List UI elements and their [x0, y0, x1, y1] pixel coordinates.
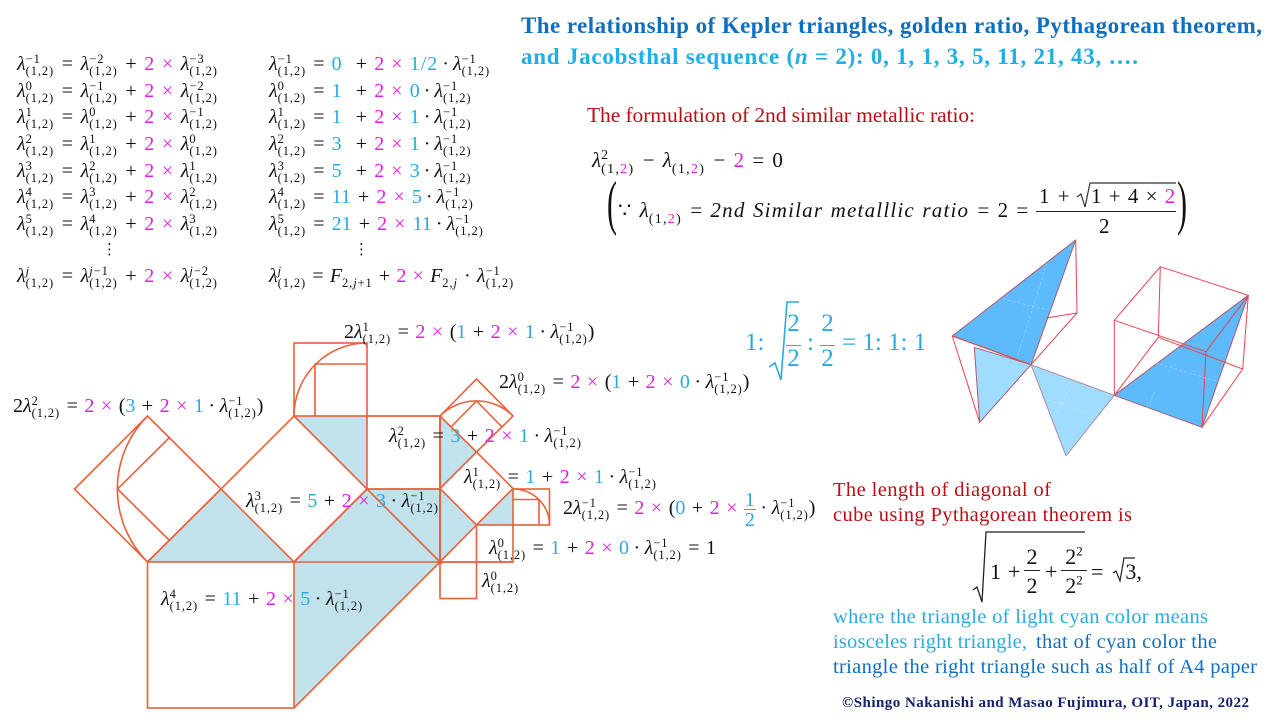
diagram label: lambda 0 equals 1: λ = 1 + 2 × 0·λ = 1 [489, 537, 716, 559]
left dark cyan triangle [952, 240, 1077, 365]
plus sign: + [1045, 559, 1057, 584]
equations: recurrence column: 2 [89, 159, 96, 173]
equations: recurrence column: (1,2) [26, 171, 54, 185]
fraction two over two: 2 [1026, 573, 1038, 598]
heading: formulation of similar metallic ratio: The formulation of 2nd similar metallic ratio: [587, 103, 975, 127]
equations: closed form column: 2,j+1 [342, 276, 373, 290]
fraction numerator: under the root: 1 + 4 × 2 [1091, 184, 1175, 208]
diamond: lambda 1 [440, 452, 513, 525]
equations: closed form column: (1,2) [278, 144, 306, 158]
equations: recurrence column: 0 [189, 132, 197, 146]
diagram label: 2 lambda 1: (1,2) [363, 332, 391, 346]
square: lambda 0 right [476, 525, 513, 562]
definition text: (1,2) [649, 212, 682, 227]
fraction two over two under root [786, 310, 801, 372]
radical signs [769, 183, 1176, 602]
equations: recurrence column: λ = λ + 2 × λ [17, 133, 189, 155]
diagram label: 2 lambda -1 [563, 489, 815, 531]
diagram label: lambda 3: 3 [255, 489, 262, 503]
equations: closed form column: (1,2) [278, 64, 306, 78]
text block: triangle colour explanation: where the triangle of light cyan color means [833, 606, 1208, 628]
diagram label: lambda 0: (1,2) [491, 581, 519, 595]
title: and Jacobsthal sequence (n = 2): 0, 1, 1, 3, 5, 11, 21, 43, …. [521, 44, 1138, 69]
equations: recurrence column: 0 [89, 105, 96, 119]
diagram label: 2 lambda -1: (1,2) [582, 508, 610, 522]
equations: closed form column: 2,j [442, 276, 458, 290]
equations: recurrence column: (1,2) [89, 276, 118, 290]
opening bracket: ( [607, 170, 617, 236]
diagram label: lambda 2: −1 [553, 424, 568, 438]
diagram label: lambda 3: (1,2) [410, 501, 439, 515]
diagram label: lambda 4: (1,2) [335, 599, 363, 613]
equations: recurrence column: λ = λ + 2 × λ [17, 265, 189, 287]
equations: recurrence column: (1,2) [89, 171, 118, 185]
diagram label: lambda 4: λ = 11 + 2 × 5·λ [161, 588, 335, 610]
heading: diagonal of cube: The length of diagonal of [833, 479, 1051, 501]
light blue right triangles [148, 416, 513, 708]
long edges [148, 416, 513, 708]
fraction two over two: 2 [821, 310, 834, 337]
equations: closed form column: (1,2) [443, 144, 472, 158]
equations: recurrence column: (1,2) [189, 171, 218, 185]
equations: recurrence column: 4 [89, 212, 96, 226]
equations: closed form column: 3 [278, 159, 285, 173]
diagram label: 2 lambda -1: 2λ = 2 × (0 + 2 × ·λ ) [563, 497, 815, 519]
equation: quadratic for similar metallic ratio: 2 [601, 148, 609, 163]
equations: recurrence column: λ = λ + 2 × λ [17, 80, 189, 102]
fraction two over two: 2 [1026, 544, 1038, 569]
equations: closed form column: (1,2) [278, 197, 306, 211]
diagram label: 2 lambda 1: 1 [363, 320, 370, 334]
fraction two over two under root: 2 [787, 345, 800, 372]
equations: closed form column: −1 [462, 52, 477, 66]
fraction two over two [1024, 544, 1040, 598]
diagram label: lambda 4: −1 [335, 587, 350, 601]
equations: recurrence column: 2 [26, 132, 33, 146]
diagram label: 2 lambda -1: 2 [745, 509, 755, 531]
diagram label: lambda 0 [482, 569, 519, 595]
diagram label: 2 lambda 2: 2 [32, 394, 39, 408]
equations: closed form column: −1 [443, 79, 458, 93]
equations: closed form column: 0 [278, 79, 285, 93]
equations: closed form column: 1 [278, 105, 285, 119]
diamond: lambda 3 [221, 416, 367, 562]
top square with arc: 2 lambda 1 [294, 343, 367, 416]
equations: closed form column: λ = 11 + 2 × 5·λ [269, 186, 445, 208]
diagram label: lambda 3: −1 [410, 489, 425, 503]
title [521, 13, 1262, 69]
equations: closed form column: (1,2) [278, 276, 306, 290]
diagram label: lambda 0: 0 [491, 569, 498, 583]
diagram label: 2 lambda 1: −1 [559, 320, 574, 334]
equations: recurrence column: (1,2) [26, 64, 54, 78]
equations: recurrence column: (1,2) [26, 91, 54, 105]
equations: closed form column: 4 [278, 185, 285, 199]
equations: closed form column: 5 [278, 212, 285, 226]
diagram label: 2 lambda 1: (1,2) [559, 332, 588, 346]
lower-left light cyan triangle [952, 336, 1031, 422]
equations: recurrence column: j [26, 264, 30, 278]
equations: recurrence column: j−2 [189, 264, 209, 278]
equations: closed form column: −1 [443, 105, 458, 119]
equations: recurrence column: −2 [89, 52, 104, 66]
equations: recurrence column: (1,2) [89, 117, 118, 131]
credit: ©Shingo Nakanishi and Masao Fujimura, OIT, Japan, 2022 [842, 695, 1249, 711]
equations: recurrence column: −1 [26, 52, 41, 66]
diagram label: lambda 0 equals 1: (1,2) [653, 548, 682, 562]
fraction two over two under root: 2 [787, 310, 800, 337]
equations: recurrence column: (1,2) [189, 117, 218, 131]
colon: : [807, 329, 814, 356]
first term: 1 + [990, 559, 1020, 584]
definition text: ∵ λ = 2nd Similar metalllic ratio = 2 = [618, 198, 1028, 222]
text block: triangle colour explanation [833, 606, 1257, 678]
equations: closed form column [268, 52, 514, 290]
equations: recurrence column: (1,2) [189, 91, 218, 105]
equations: closed form column: (1,2) [278, 91, 306, 105]
diagram label: lambda 1: 1 [473, 465, 480, 479]
diagram label: 2 lambda 2: (1,2) [228, 406, 257, 420]
equals square root of three: = 3, [1091, 559, 1142, 584]
equations: recurrence column: −3 [189, 52, 204, 66]
diagram label: 2 lambda -1: −1 [780, 496, 795, 510]
diagram label: 2 lambda 0: (1,2) [518, 382, 546, 396]
diagram label: 2 lambda 0: (1,2) [714, 382, 743, 396]
equations: recurrence column: 3 [26, 159, 33, 173]
equations: closed form column: −1 [486, 264, 501, 278]
equations: closed form column: (1,2) [278, 224, 306, 238]
diagram label: lambda 0 equals 1: (1,2) [498, 548, 526, 562]
equation: quadratic for similar metallic ratio: (1,2) [601, 162, 634, 177]
diagram label: 2 lambda -1: −1 [582, 496, 597, 510]
diagram label: lambda 3: λ = 5 + 2 × 3·λ [246, 490, 410, 512]
equations: closed form column: (1,2) [278, 171, 306, 185]
equations: recurrence column: (1,2) [189, 276, 218, 290]
fraction denominator: 2 [1099, 214, 1110, 238]
equations: closed form column: (1,2) [278, 117, 306, 131]
equations: recurrence column: λ = λ + 2 × λ [17, 186, 189, 208]
equations: recurrence column: λ = λ + 2 × λ [17, 106, 189, 128]
equations: recurrence column: (1,2) [89, 224, 118, 238]
equations: closed form column: −1 [443, 159, 458, 173]
equations: recurrence column: (1,2) [189, 224, 218, 238]
fraction two squared over two squared: 22 [1065, 573, 1083, 598]
diagram label: lambda 1: (1,2) [628, 477, 657, 491]
equations: closed form column: −1 [278, 52, 293, 66]
diagram label: lambda 0: λ [482, 570, 491, 592]
equations: recurrence column: 3 [189, 212, 197, 226]
middle light cyan triangle [1031, 365, 1114, 456]
diagram label: 2 lambda 2: 2λ = 2 × (3 + 2 × 1·λ ) [13, 395, 263, 417]
equations: recurrence column: 0 [26, 79, 33, 93]
text block: triangle colour explanation: that of cyan color the [1036, 631, 1217, 653]
diagram label: 2 lambda 2: (1,2) [32, 406, 60, 420]
diagram label: 2 lambda 1: 2λ = 2 × (1 + 2 × 1·λ ) [344, 321, 594, 343]
diagram label: 2 lambda 0: 2λ = 2 × (1 + 2 × 0·λ ) [499, 371, 749, 393]
equations: recurrence column: λ = λ + 2 × λ [17, 213, 189, 235]
equations: closed form column: ⋮ [354, 240, 369, 258]
equations: recurrence column: (1,2) [189, 64, 218, 78]
fraction numerator: one plus: 1 + [1039, 184, 1070, 208]
equations: recurrence column: (1,2) [189, 144, 218, 158]
equations: closed form column: λ = 1 + 2 × 0·λ [269, 80, 443, 102]
equations: recurrence column: (1,2) [89, 144, 118, 158]
diagram label: 2 lambda 0: −1 [714, 370, 729, 384]
equations: closed form column: λ = 1 + 2 × 1·λ [269, 106, 443, 128]
equations: closed form column: λ = 3 + 2 × 1·λ [269, 133, 443, 155]
equations: recurrence column: (1,2) [26, 117, 54, 131]
title: The relationship of Kepler triangles, golden ratio, Pythagorean theorem, [521, 13, 1262, 38]
equations: recurrence column: j−1 [89, 264, 109, 278]
square: lambda 0 bottom [440, 562, 476, 598]
diagram label: lambda 3: (1,2) [255, 501, 283, 515]
fraction bar [1036, 211, 1176, 212]
equation: quadratic for similar metallic ratio: λ − λ − 2 = 0 [592, 148, 783, 172]
equation: metallic ratio definition [607, 170, 1187, 238]
equations: recurrence column: (1,2) [89, 197, 118, 211]
equations: recurrence column: 1 [89, 132, 96, 146]
equations: recurrence column: λ = λ + 2 × λ [17, 160, 189, 182]
heading: diagonal of cube [833, 479, 1132, 526]
text block: triangle colour explanation: isosceles right triangle, [833, 631, 1027, 653]
equations: closed form column: (1,2) [443, 171, 472, 185]
equations: recurrence column: 5 [26, 212, 33, 226]
text block: triangle colour explanation: triangle the right triangle such as half of A4 paper [833, 656, 1257, 678]
diagram label: lambda 1: λ = 1 + 2 × 1·λ [464, 466, 628, 488]
diagram label: lambda 2: (1,2) [398, 436, 426, 450]
diagram label: lambda 4: 4 [170, 587, 177, 601]
equations: closed form column: (1,2) [445, 197, 474, 211]
equations: closed form column: λ = 21 + 2 × 11·λ [269, 213, 455, 235]
equations: recurrence column: (1,2) [26, 224, 54, 238]
diagram label: lambda 1: (1,2) [473, 477, 501, 491]
result: = 1: 1: 1 [842, 329, 926, 356]
equations: closed form column: j [278, 264, 282, 278]
geometric diagram: nested squares and right triangles [74, 343, 550, 708]
equations: closed form column: λ = 0 + 2 × 1/2·λ [269, 53, 462, 75]
equations: recurrence column: 3 [89, 185, 96, 199]
equations: recurrence column: (1,2) [26, 144, 54, 158]
small diamond with arc: 2 lambda 0 [440, 379, 513, 452]
leading one and colon: 1: [745, 329, 764, 356]
diagram label: lambda 2: 2 [398, 424, 405, 438]
equations: recurrence column: −2 [189, 79, 204, 93]
diagram label: 2 lambda 2: −1 [228, 394, 243, 408]
equation: quadratic for similar metallic ratio: (1,2) [672, 162, 705, 177]
right cube with dark cyan triangle [1114, 267, 1248, 427]
closing bracket: ) [1177, 170, 1187, 236]
equations: recurrence column: (1,2) [189, 197, 218, 211]
ratio equation [745, 310, 926, 372]
equations: recurrence column: −1 [89, 79, 104, 93]
3D folded cube figure [952, 240, 1248, 456]
heading: diagonal of cube: cube using Pythagorean theorem is [833, 504, 1132, 526]
equations: recurrence column: (1,2) [89, 91, 118, 105]
equations: recurrence column: 1 [189, 159, 197, 173]
diagram label: lambda 2: (1,2) [553, 436, 582, 450]
small square with arc: 2 lambda -1 [513, 489, 550, 525]
equations: closed form column: (1,2) [443, 117, 472, 131]
diagram label: lambda 0 equals 1: −1 [653, 536, 668, 550]
equations: recurrence column: λ = λ + 2 × λ [17, 53, 189, 75]
equations: closed form column: λ = F + 2 × F · λ [269, 265, 486, 287]
left diamond with arc: 2 lambda 2 [74, 416, 221, 562]
equations: recurrence column: 4 [26, 185, 33, 199]
diagram label: lambda 1: −1 [628, 465, 643, 479]
equation: cube diagonal by Pythagorean theorem [990, 544, 1142, 598]
square: lambda 4 [148, 562, 294, 708]
equations: closed form column: (1,2) [443, 91, 472, 105]
equations: recurrence column: 2 [189, 185, 197, 199]
equations: recurrence column: ⋮ [102, 240, 117, 258]
fraction two squared over two squared [1061, 544, 1087, 598]
diagram label: lambda 0 equals 1: 0 [498, 536, 505, 550]
diagram label: lambda 4: (1,2) [170, 599, 198, 613]
equations: recurrence column: −1 [189, 105, 204, 119]
diagram label: 2 lambda -1: (1,2) [780, 508, 809, 522]
equations: closed form column: −1 [443, 132, 458, 146]
diagram label: 2 lambda 0: 0 [518, 370, 525, 384]
equations: recurrence column: 1 [26, 105, 33, 119]
equations: closed form column: λ = 5 + 2 × 3·λ [269, 160, 443, 182]
square: lambda 2 [367, 416, 440, 489]
equations: closed form column: (1,2) [455, 224, 484, 238]
equations: closed form column: −1 [455, 212, 470, 226]
diagram label: 2 lambda -1: 1 [745, 489, 755, 511]
fraction two squared over two squared: 22 [1065, 544, 1083, 569]
fraction two over two: 2 [821, 345, 834, 372]
equations: closed form column: (1,2) [486, 276, 514, 290]
equations: recurrence column [16, 52, 218, 290]
equations: closed form column: 2 [278, 132, 285, 146]
equations: recurrence column: (1,2) [26, 276, 54, 290]
diagram label: lambda 2: λ = 3 + 2 × 1·λ [389, 425, 553, 447]
equations: recurrence column: (1,2) [89, 64, 118, 78]
fraction two over two [820, 310, 835, 372]
equations: closed form column: −1 [445, 185, 460, 199]
equations: closed form column: (1,2) [462, 64, 490, 78]
equations: recurrence column: (1,2) [26, 197, 54, 211]
